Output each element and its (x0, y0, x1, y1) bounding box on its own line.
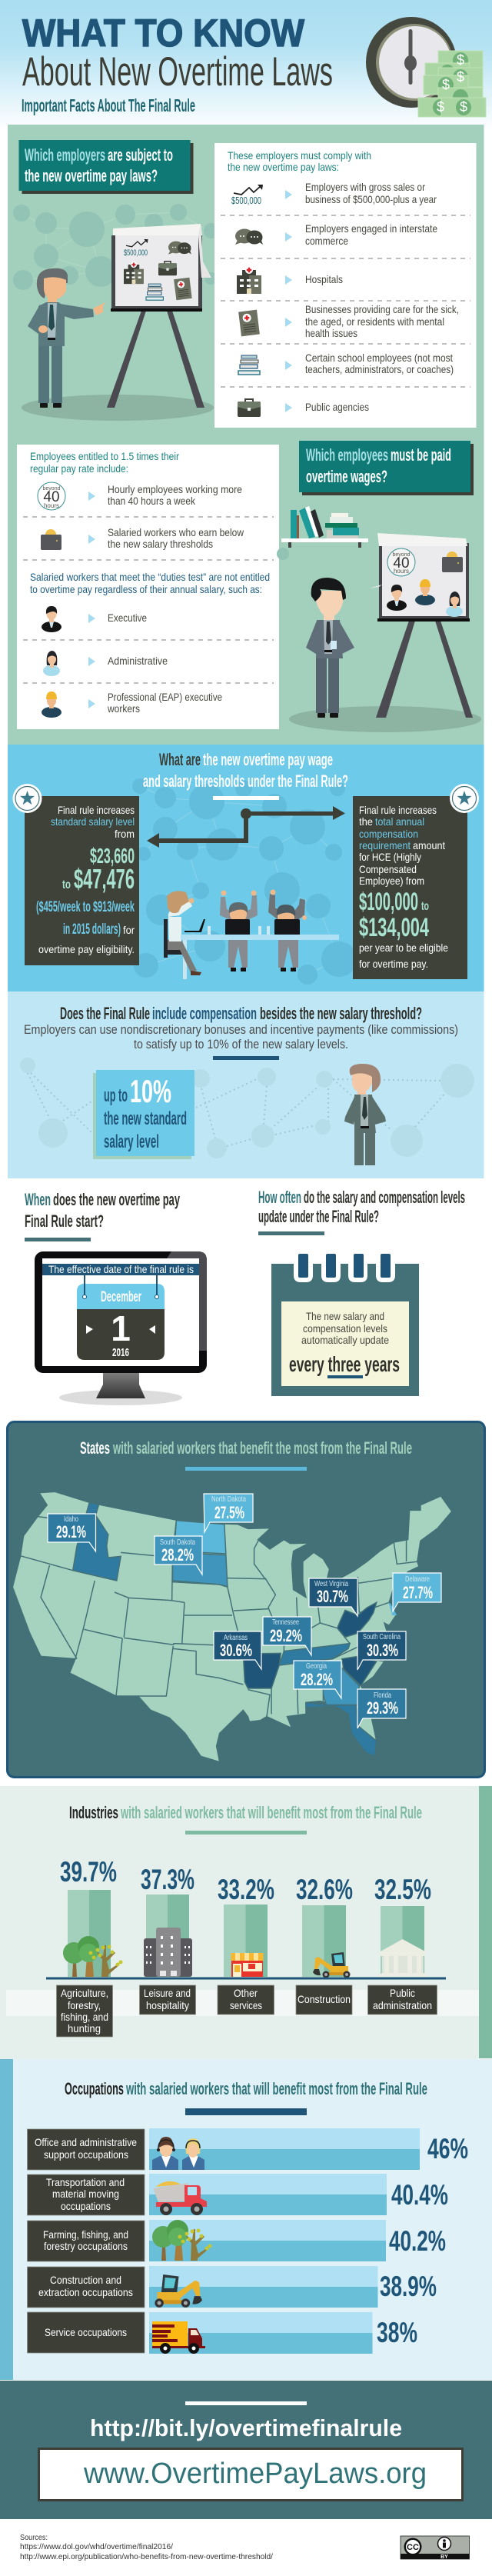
box: total annual compensation: Compensated (359, 863, 417, 875)
employee person (306, 578, 354, 718)
duties test note (30, 571, 270, 595)
box: total annual compensation: $134,004 (359, 913, 429, 942)
box: standard salary level: overtime pay eligibility. (38, 943, 135, 955)
header background (0, 0, 492, 131)
heading: occupations (65, 2079, 427, 2115)
icon: courthouse (377, 1939, 428, 1977)
row: gross sales: business of $500,000-plus a year (305, 193, 437, 205)
heading: which employees: overtime wages? (306, 467, 387, 486)
row: construction and extraction: 38.9% (380, 2271, 437, 2302)
box: standard salary level: to (62, 878, 71, 891)
bar: public administration: administration (373, 1999, 432, 2011)
row: care businesses: Businesses providing care for the sick, (305, 303, 459, 315)
callout: idaho: 29.1% (56, 1522, 86, 1541)
bar: leisure: Leisure and (144, 1987, 191, 1999)
callout: georgia: 28.2% (301, 1670, 333, 1689)
title: WHAT TO KNOW (22, 12, 305, 55)
row: gross sales: $500,000 (231, 195, 261, 206)
bar: public administration: Public (390, 1987, 415, 1999)
callout: south carolina: 30.3% (367, 1641, 398, 1660)
sources: https://www.dol.gov/whd/overtime/final2016/ (20, 2543, 173, 2551)
row: administrative (43, 651, 168, 676)
panel: employees list (17, 445, 279, 729)
box: standard salary level: Final rule increases (58, 804, 135, 816)
callout: up to 10%: up to (104, 1085, 128, 1106)
link box: website: www.OvertimePayLaws.org (83, 2458, 427, 2490)
employee easel: 40 (393, 555, 410, 572)
row: transportation: Transportation and (46, 2176, 125, 2188)
row: hourly employees: 40 (43, 489, 60, 505)
row: interstate commerce: commerce (305, 235, 348, 247)
row: service (28, 2312, 417, 2354)
block: when does the rule start (25, 1190, 207, 1405)
panel: thresholds (8, 745, 484, 991)
callout: south dakota: South Dakota (160, 1538, 195, 1547)
duties test note: Salaried workers that meet the “duties test” are not entitled (30, 571, 270, 583)
sources (20, 2534, 273, 2561)
callout: arkansas (214, 1631, 261, 1669)
panel: states map (8, 1421, 484, 1777)
icon: clock and money: $ (437, 99, 444, 115)
panel: compensation (8, 991, 484, 1178)
employee easel: hours (394, 568, 409, 575)
callout: south dakota (155, 1536, 202, 1575)
row: gross sales: Employers with gross sales or (305, 181, 425, 193)
box: total annual compensation: compensation (359, 828, 418, 840)
row: care businesses (238, 303, 459, 339)
icon: star badge left (12, 784, 42, 813)
callout: tennessee: Tennessee (272, 1618, 299, 1627)
row: transportation: 40.4% (391, 2179, 448, 2211)
callout: up to 10%: salary level (104, 1131, 159, 1152)
row: hourly employees (38, 482, 242, 510)
icon: star badge right (450, 784, 479, 813)
presenter easel: $500,000 (124, 248, 148, 258)
callout: delaware: Delaware (405, 1575, 430, 1584)
block: how often (258, 1188, 465, 1396)
icon: clock and money (366, 17, 486, 117)
icon: store (231, 1953, 263, 1977)
icon: notepad calendar: compensation levels (303, 1322, 387, 1335)
box: standard salary level (25, 796, 139, 965)
list intro (30, 450, 179, 475)
box: total annual compensation: for overtime pay. (359, 958, 428, 970)
callout: south dakota: 28.2% (161, 1545, 194, 1565)
box: standard salary level: from (115, 828, 135, 840)
callout: west virginia: West Virginia (314, 1580, 348, 1588)
heading and intro (24, 1004, 458, 1060)
callout: delaware: 27.7% (403, 1583, 433, 1602)
callout: florida: Florida (374, 1691, 391, 1700)
box: total annual compensation: $100,000 (359, 888, 418, 915)
block: when does the rule start: When (25, 1190, 51, 1209)
bar: leisure (140, 1864, 195, 2014)
list intro: regular pay rate include: (30, 462, 128, 475)
row: executive: Executive (108, 612, 147, 624)
bar: leisure: hospitality (146, 1999, 189, 2011)
row: hourly employees: than 40 hours a week (108, 495, 196, 507)
callout: west virginia (309, 1578, 357, 1616)
icon: monitor with date: 2016 (112, 1346, 129, 1359)
callout: idaho (48, 1514, 95, 1551)
title: Important Facts About The Final Rule (22, 95, 195, 115)
row: executive (42, 606, 147, 632)
box: total annual compensation (353, 796, 467, 979)
sources: Sources: (20, 2534, 48, 2542)
icon: creative commons badge (401, 2536, 469, 2560)
box: total annual compensation: amount (413, 839, 445, 851)
bar: agriculture: 39.7% (60, 1856, 117, 1888)
box: standard salary level: standard salary level (51, 815, 135, 828)
heading and intro: Does the Final Rule (60, 1004, 150, 1023)
network background icons (13, 204, 219, 290)
bar: other services: services (230, 1999, 262, 2011)
meeting people (164, 889, 339, 979)
row: salaried workers: the new salary thresholds (108, 538, 213, 550)
row: salaried workers: Salaried workers who earn below (108, 526, 244, 538)
bar: agriculture: hunting (68, 2022, 101, 2034)
icon: delivery truck (152, 2321, 205, 2354)
list intro: These employers must comply with (228, 149, 371, 162)
icon: bookshelf (277, 506, 368, 560)
row: school employees: Certain school employees (not most (305, 352, 453, 364)
dotted network (20, 1058, 474, 1158)
panel: industries (0, 1786, 492, 2059)
callout: arkansas: Arkansas (224, 1634, 248, 1642)
bar: construction (296, 1874, 353, 2014)
row: school employees (238, 352, 454, 375)
bar: other services (218, 1874, 274, 2014)
callout: north dakota (204, 1494, 253, 1532)
row: farming: Farming, fishing, and (43, 2228, 128, 2241)
icon: monitor with date: 1 (111, 1308, 131, 1348)
row: hospitals: Hospitals (305, 273, 343, 285)
list intro: the new overtime pay laws: (228, 161, 339, 173)
title: About New Overtime Laws (22, 49, 333, 95)
heading and intro: include compensation (152, 1004, 257, 1023)
heading: which employers: the new overtime pay laws? (25, 166, 158, 185)
callout: up to 10%: 10% (130, 1073, 171, 1109)
icon: clock and money: $ (460, 99, 467, 115)
bar: agriculture: fishing, and (61, 2011, 108, 2023)
callout: tennessee (263, 1617, 311, 1655)
callout: georgia: Georgia (306, 1662, 327, 1671)
box: total annual compensation: for HCE (Highly (359, 851, 421, 863)
link box: website (38, 2449, 463, 2500)
icon: monitor with date: The effective date of the final rule is (48, 1263, 194, 1275)
row: transportation: occupations (61, 2200, 111, 2212)
heading: industries: Industries (69, 1803, 118, 1822)
heading: states: States (80, 1438, 110, 1458)
heading: thresholds: the new overtime pay wage (203, 750, 333, 769)
heading: which employees: must be paid (391, 445, 451, 465)
row: transportation (28, 2174, 448, 2215)
row: farming: 40.2% (389, 2225, 446, 2257)
panel: employers (8, 125, 484, 745)
block: how often: How often (258, 1188, 301, 1207)
network background icons (132, 778, 357, 985)
callout: west virginia: 30.7% (317, 1587, 348, 1606)
panel: occupations (0, 2059, 492, 2380)
callout: north dakota: North Dakota (211, 1495, 246, 1504)
box: total annual compensation: per year to be eligible (359, 941, 448, 954)
icon: creative commons badge: CC (407, 2543, 419, 2552)
callout: florida: 29.3% (367, 1698, 398, 1718)
bar: other services: Other (234, 1987, 258, 1999)
heading: which employees (299, 441, 474, 495)
callout: arkansas: 30.6% (220, 1641, 252, 1660)
row: service: 38% (377, 2317, 417, 2348)
row: construction and extraction: extraction occupations (38, 2286, 133, 2298)
heading: thresholds: and salary thresholds under the Final Rule? (143, 771, 348, 791)
row: professional: workers (107, 702, 140, 715)
icon: clock and money: $ (457, 69, 464, 85)
block: when does the rule start: Final Rule start? (25, 1211, 104, 1231)
row: care businesses: health issues (305, 327, 357, 339)
row: gross sales (231, 181, 437, 206)
box: standard salary level: $23,660 (90, 844, 135, 868)
bar: public administration: 32.5% (374, 1874, 431, 1905)
box: total annual compensation: the (359, 815, 373, 828)
employee easel (289, 533, 481, 732)
icon: creative commons badge: BY (440, 2554, 448, 2560)
us map (12, 1491, 452, 1762)
block: how often: update under the Final Rule? (258, 1207, 379, 1226)
row: office and administrative: Office and administrative (35, 2136, 137, 2148)
icon: notepad calendar: automatically update (301, 1334, 389, 1346)
icon: notepad calendar: The new salary and (306, 1310, 384, 1322)
row: hourly employees: Hourly employees working more (108, 483, 242, 495)
row: office and administrative (28, 2128, 468, 2170)
bar: public administration (367, 1874, 437, 2014)
bar: agriculture: Agriculture, (61, 1987, 108, 1999)
heading: states (80, 1438, 412, 1471)
callout: south carolina (357, 1631, 406, 1670)
bar: agriculture (57, 1856, 123, 2037)
callout: tennessee: 29.2% (270, 1626, 302, 1645)
box: standard salary level: ($455/week to $913/week (36, 899, 135, 915)
list intro: Employees entitled to 1.5 times their (30, 450, 179, 462)
bar: other services: 33.2% (218, 1874, 274, 1905)
heading: industries (69, 1803, 422, 1835)
icon: monitor with date: December (101, 1289, 141, 1305)
icon: notepad calendar: every three years (289, 1352, 400, 1376)
icon: notepad calendar (271, 1254, 419, 1396)
row: administrative: Administrative (108, 655, 168, 667)
icon: clock and money: $ (442, 77, 450, 92)
presenter person (28, 268, 105, 408)
presenter easel (22, 224, 214, 421)
bar: leisure: 37.3% (141, 1864, 194, 1895)
heading: thresholds: What are (159, 750, 201, 769)
list intro (228, 149, 371, 173)
heading: thresholds (143, 750, 348, 800)
heading: which employers (18, 140, 194, 194)
row: construction and extraction (28, 2266, 437, 2308)
bar: construction: 32.6% (296, 1874, 353, 1905)
row: transportation: material moving (52, 2188, 119, 2200)
box: total annual compensation: to (421, 900, 429, 913)
link: short url: http://bit.ly/overtimefinalrule (90, 2414, 402, 2441)
row: salaried workers (41, 526, 244, 550)
person (344, 1064, 386, 1165)
heading and intro: to satisfy up to 10% of the new salary levels. (134, 1037, 348, 1051)
callout: georgia (294, 1661, 341, 1698)
row: office and administrative: 46% (427, 2133, 468, 2164)
sources: http://www.epi.org/publication/who-benefits-from-new-overtime-threshold/ (20, 2553, 273, 2561)
box: standard salary level: for (123, 924, 135, 936)
callout: delaware (393, 1573, 441, 1611)
row: professional (42, 691, 222, 718)
arrows (147, 806, 345, 848)
row: hospitals (237, 266, 343, 294)
bar: construction: Construction (298, 1993, 351, 2005)
heading: which employers: Which employers (25, 145, 105, 165)
row: farming (28, 2220, 446, 2261)
icon: buildings (144, 1928, 192, 1977)
heading: which employees: Which employees (306, 445, 388, 465)
title (22, 12, 333, 115)
row: hourly employees: hours (44, 502, 59, 509)
panel: footer links (0, 2381, 492, 2519)
row: hourly employees: beyond (43, 486, 61, 492)
bar: agriculture: forestry, (68, 1999, 101, 2011)
row: construction and extraction: Construction and (50, 2274, 121, 2286)
row: public agencies (238, 399, 369, 417)
row: care businesses: the aged, or residents with mental (305, 315, 444, 328)
callout: up to 10%: the new standard (104, 1108, 187, 1129)
duties test note: to overtime pay regardless of their annual salary, such as: (30, 583, 262, 595)
row: service: Service occupations (45, 2326, 127, 2338)
row: public agencies: Public agencies (305, 401, 369, 413)
callout: florida (357, 1689, 406, 1728)
box: total annual compensation: total annual (375, 815, 424, 828)
callout: idaho: Idaho (64, 1515, 78, 1524)
heading: occupations: Occupations (65, 2079, 124, 2098)
row: professional: Professional (EAP) executive (108, 691, 222, 703)
row: interstate commerce (235, 222, 437, 247)
box: standard salary level: $47,476 (74, 863, 135, 895)
box: total annual compensation: Employee) from (359, 875, 424, 887)
icon: monitor with date (35, 1251, 207, 1405)
employee easel: beyond (393, 552, 411, 558)
icon: clock and money: $ (457, 52, 464, 68)
callout: south carolina: South Carolina (363, 1633, 401, 1641)
heading: which employers: are subject to (108, 145, 173, 165)
callout: up to 10% (93, 1070, 194, 1159)
callout: north dakota: 27.5% (214, 1503, 244, 1522)
box: total annual compensation: Final rule increases (359, 804, 437, 816)
block: when does the rule start: does the new overtime pay (53, 1190, 180, 1209)
box: standard salary level: in 2015 dollars) (63, 921, 121, 938)
icon: dump truck (153, 2181, 207, 2215)
row: school employees: teachers, administrators, or coaches) (305, 363, 454, 375)
row: office and administrative: support occupations (44, 2148, 128, 2161)
box: total annual compensation: requirement (359, 839, 411, 851)
row: interstate commerce: Employers engaged in interstate (305, 222, 437, 235)
row: farming: forestry occupations (44, 2240, 128, 2252)
panel: employers list (214, 143, 477, 428)
icon: call center workers (152, 2137, 204, 2170)
